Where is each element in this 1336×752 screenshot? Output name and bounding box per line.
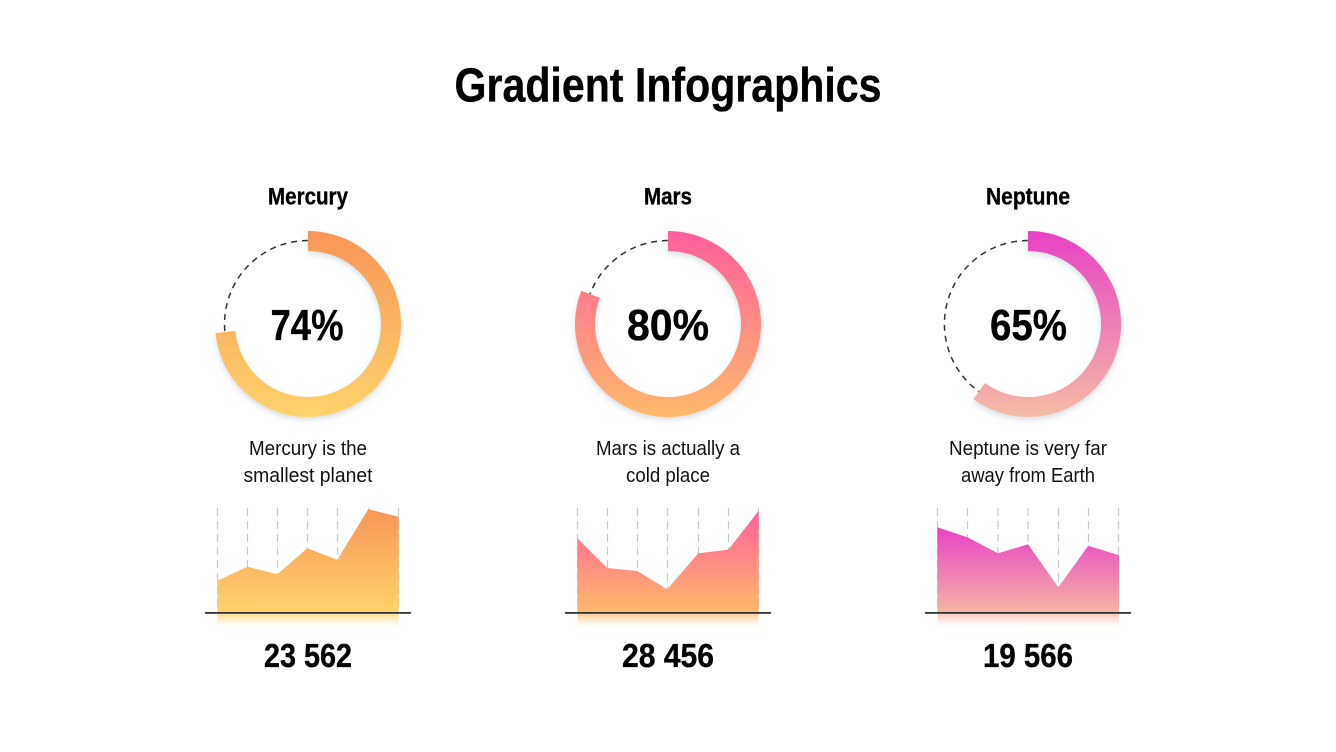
- value: Neptune: 19 566: [983, 637, 1073, 674]
- description: Mars: cold place: [626, 465, 710, 487]
- description: Mars: [596, 438, 741, 487]
- value: Mercury: 23 562: [264, 637, 352, 674]
- description: Mercury: Mercury is the: [249, 438, 367, 460]
- donut chart: Mars 80%: [585, 240, 751, 407]
- title: Gradient Infographics: [454, 60, 882, 112]
- heading: Neptune: Neptune: [986, 184, 1070, 210]
- donut chart: Mars 80%: 80%: [627, 301, 709, 350]
- heading: Mars: Mars: [644, 184, 692, 210]
- heading: Mercury: Mercury: [268, 184, 349, 210]
- value: Mars: 28 456: [622, 637, 714, 674]
- panel: Mercury: [205, 184, 411, 674]
- description: Neptune: away from Earth: [961, 465, 1095, 487]
- donut chart: Neptune 65%: [944, 240, 1111, 407]
- description: Mars: Mars is actually a: [596, 438, 741, 460]
- donut chart: Mercury 74%: 74%: [270, 301, 344, 350]
- area chart: Mercury: [205, 508, 411, 626]
- donut chart: Mercury 74%: [225, 240, 391, 407]
- description: Mercury: smallest planet: [244, 465, 373, 487]
- description: Neptune: Neptune is very far: [949, 438, 1107, 460]
- panel: Neptune: [925, 184, 1131, 674]
- donut chart: Neptune 65%: 65%: [990, 301, 1067, 350]
- area chart: Mars: [565, 508, 771, 626]
- panel: Mars: [565, 184, 771, 674]
- description: Mercury: [244, 438, 373, 487]
- description: Neptune: [949, 438, 1107, 487]
- area chart: Neptune: [925, 508, 1131, 626]
